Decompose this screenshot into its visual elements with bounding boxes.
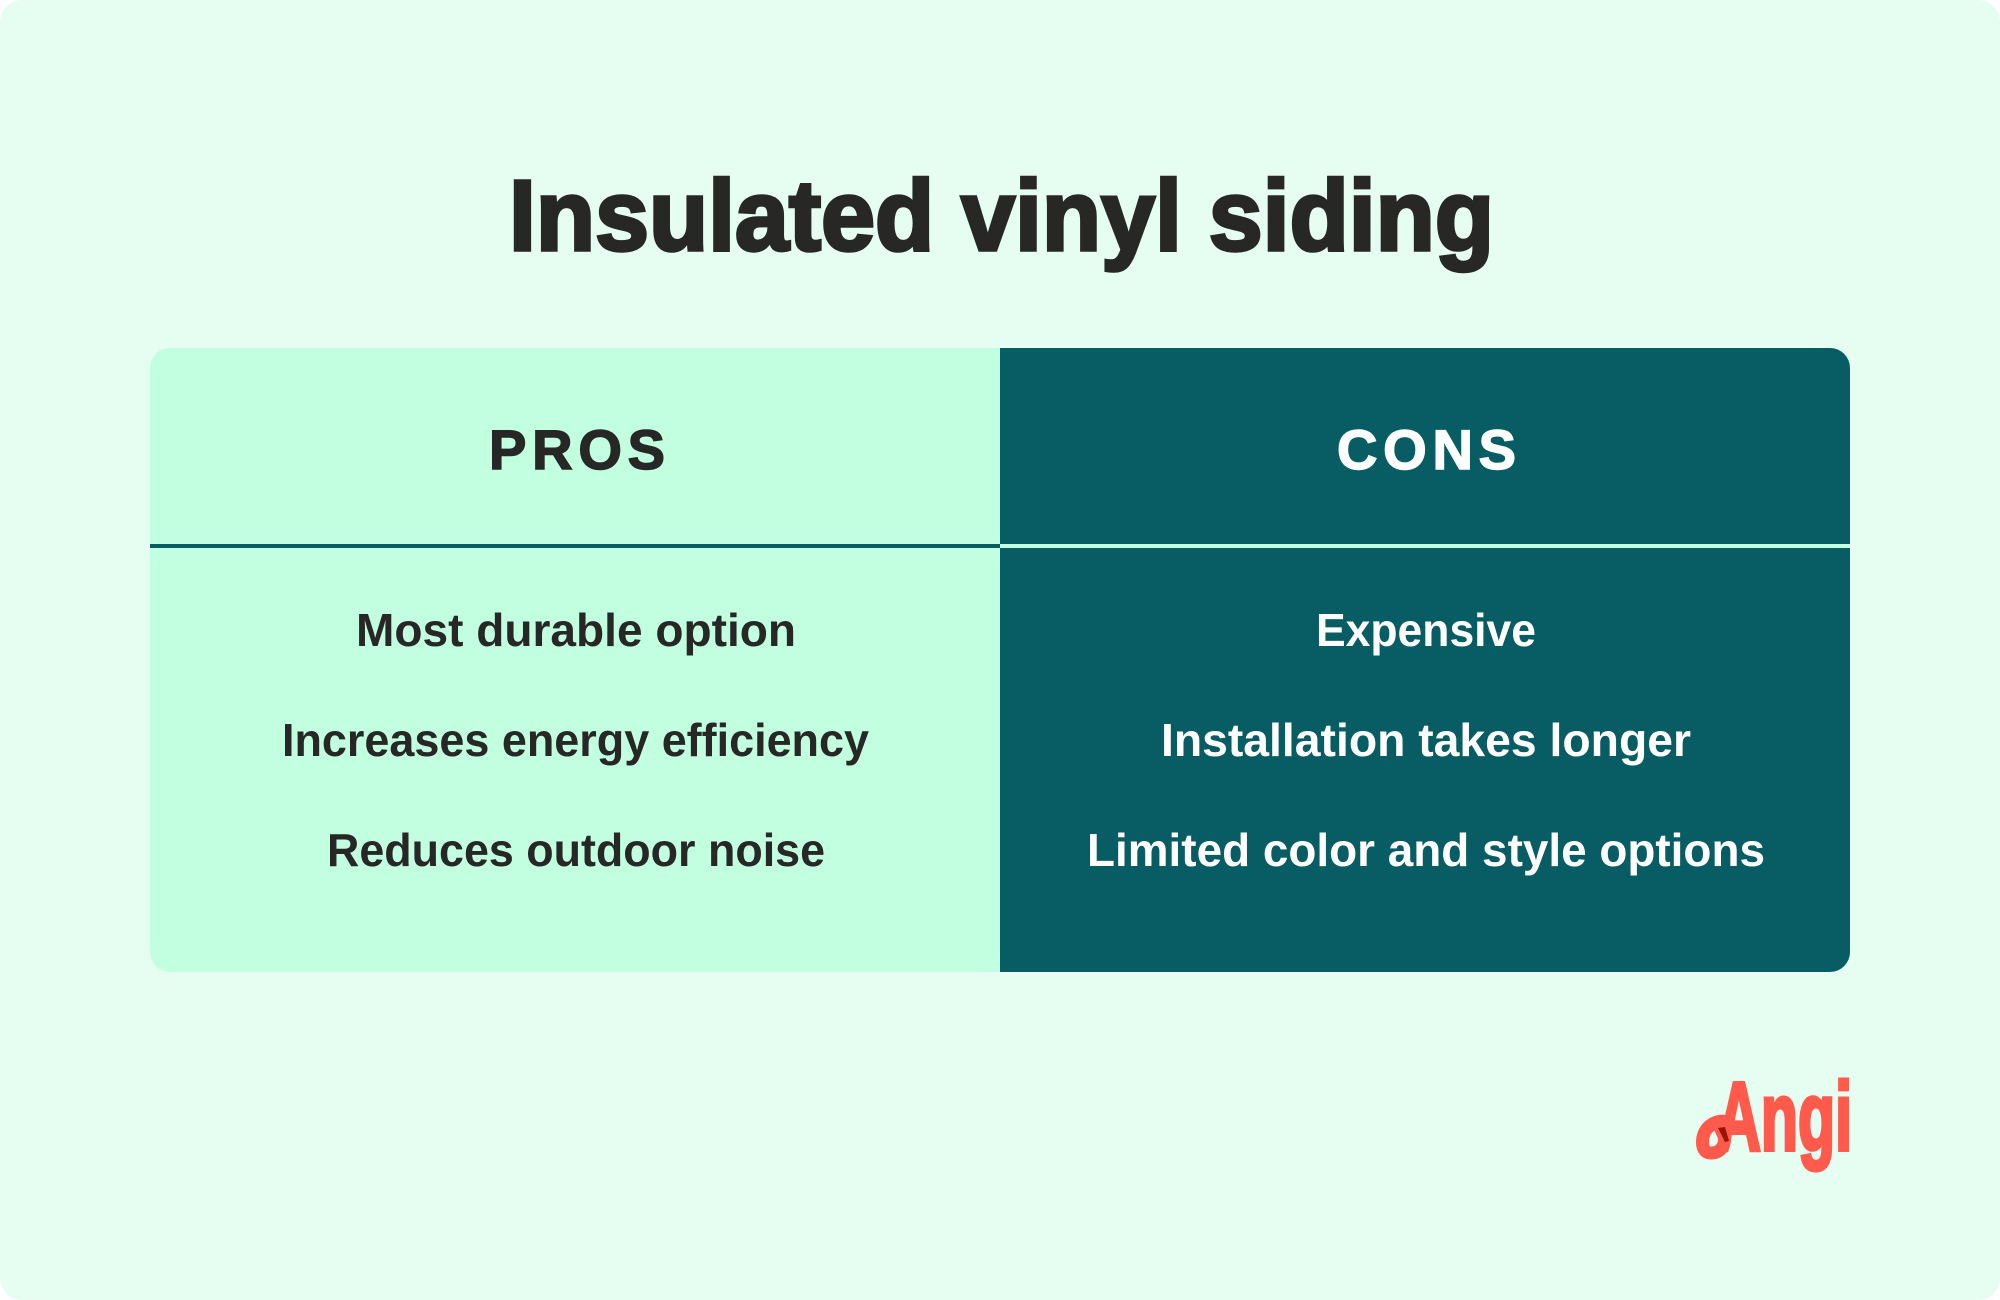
pros heading: PROS	[489, 418, 665, 481]
panel: cons	[1000, 348, 1850, 972]
logo: Angi	[1702, 1062, 1852, 1171]
cons list	[1087, 604, 1765, 876]
cons heading: CONS	[1337, 418, 1516, 481]
panel: pros	[150, 348, 1000, 972]
cons list: Limited color and style options	[1087, 824, 1765, 876]
pros list: Increases energy efficiency	[282, 714, 869, 766]
cons list: Expensive	[1316, 604, 1536, 656]
logo: Angi: Angi	[1717, 1062, 1852, 1171]
cons list: Installation takes longer	[1161, 714, 1691, 766]
pros list: Reduces outdoor noise	[327, 824, 825, 876]
pros list: Most durable option	[356, 604, 796, 656]
title: Insulated vinyl siding	[509, 160, 1494, 272]
pros list	[282, 604, 869, 876]
